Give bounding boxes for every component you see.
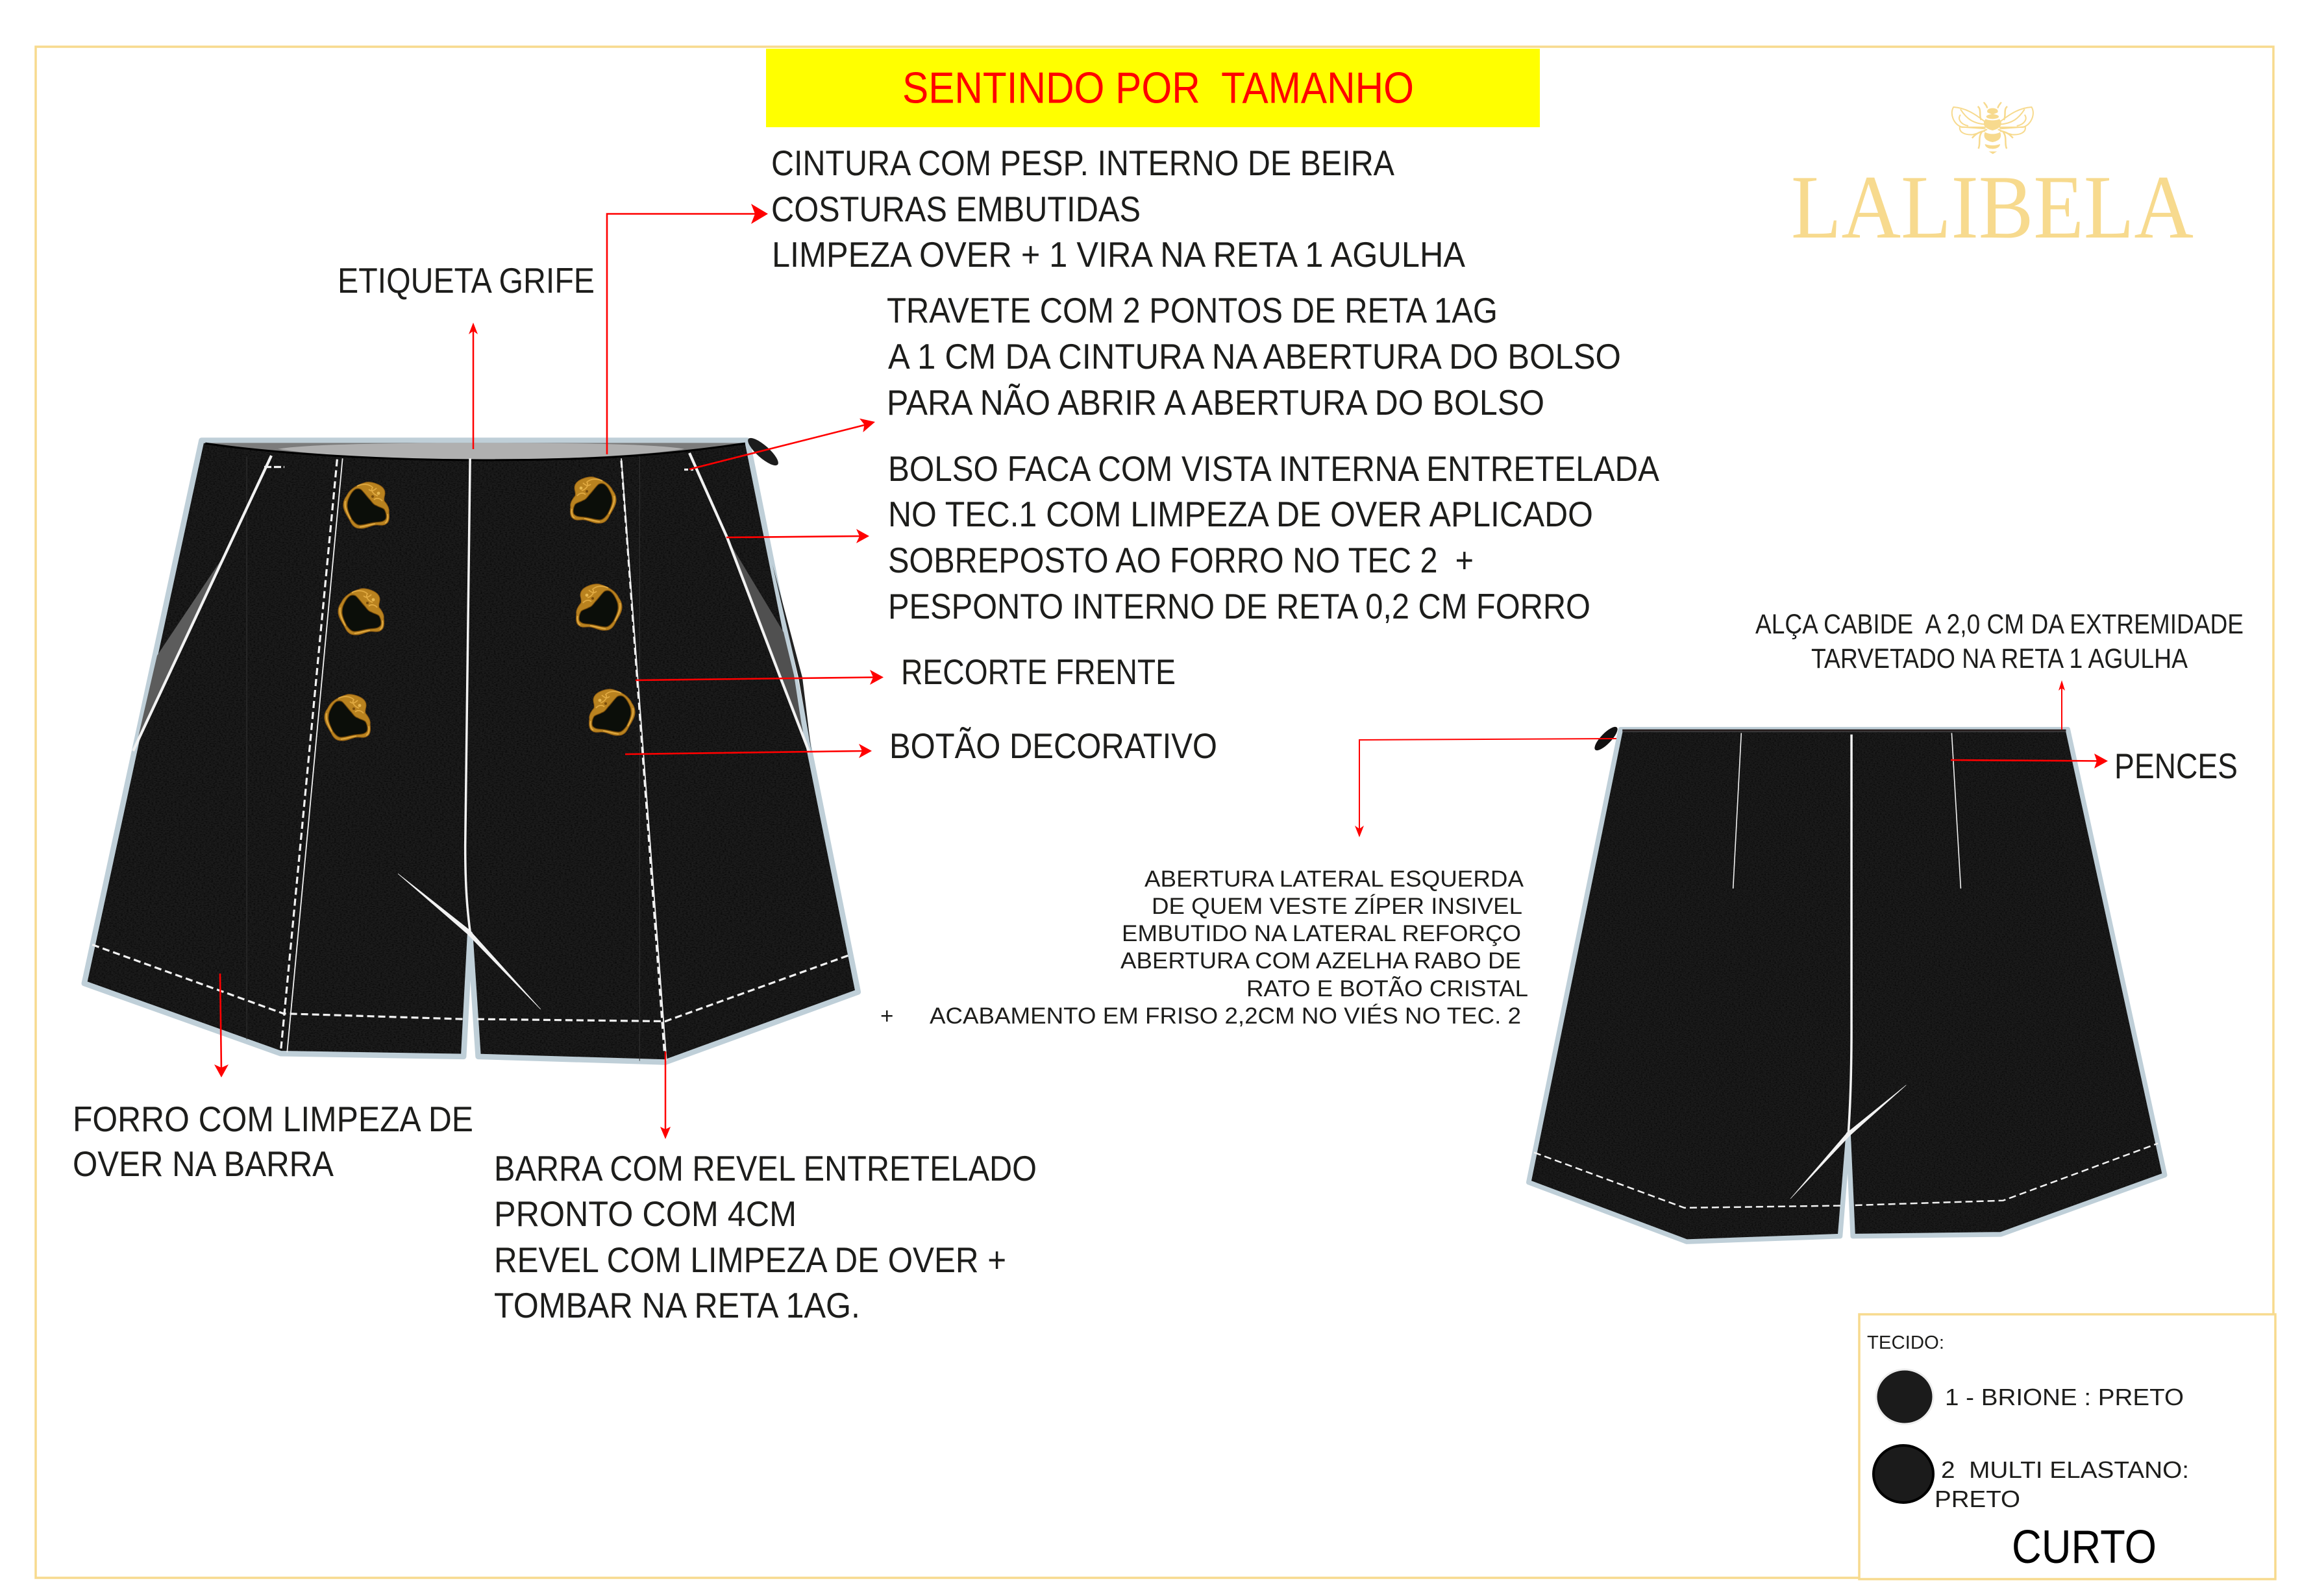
text: cintura: CINTURA COM PESP. INTERNO DE BEIRA	[771, 143, 1394, 183]
side tack back	[1592, 724, 1620, 754]
swatch: multi elastano	[1874, 1445, 1933, 1503]
arrow: pences	[1951, 754, 2108, 768]
text: abertura lateral: EMBUTIDO NA LATERAL REFORÇO	[1122, 921, 1521, 946]
text: barra	[494, 1148, 1037, 1325]
text: travete: A 1 CM DA CINTURA NA ABERTURA DO BOLSO	[888, 336, 1621, 376]
front fabric body	[84, 440, 858, 1062]
text: barra: TOMBAR NA RETA 1AG.	[494, 1285, 860, 1325]
back centre seam	[1848, 735, 1851, 1135]
label: brione: 1 - BRIONE : PRETO	[1945, 1384, 2184, 1410]
text: cintura: COSTURAS EMBUTIDAS	[771, 189, 1141, 229]
label: multi elastano: 2 MULTI ELASTANO:	[1941, 1456, 2189, 1483]
text: abertura lateral	[880, 866, 1528, 1029]
text: forro	[73, 1099, 473, 1184]
text: abertura lateral: DE QUEM VESTE ZÍPER INSIVEL	[1152, 894, 1522, 919]
text: bolso faca	[888, 448, 1659, 626]
seams and stitching	[92, 456, 848, 1061]
arrow: alca cabide	[2059, 680, 2065, 730]
text: abertura lateral: ABERTURA LATERAL ESQUERDA	[1144, 866, 1524, 892]
arrow: bolso faca	[726, 529, 869, 543]
text: cintura	[771, 143, 1465, 275]
logo: Lalibela	[1791, 102, 2194, 258]
text: bolso faca: SOBREPOSTO AO FORRO NO TEC 2 +	[888, 540, 1474, 580]
decorative buttons	[325, 477, 635, 741]
icon: bee	[1952, 102, 2033, 154]
text: abertura lateral: ACABAMENTO EM FRISO 2,2CM NO VIÉS NO TEC. 2	[930, 1003, 1521, 1029]
panel: tecido legend	[1859, 1314, 2275, 1579]
label: multi elastano	[1935, 1456, 2189, 1512]
arrow: botao decorativo	[625, 744, 872, 758]
text: barra: PRONTO COM 4CM	[494, 1194, 797, 1234]
hem stitching	[1534, 1153, 1842, 1208]
swatch: brione	[1876, 1369, 1933, 1424]
text: bolso faca: BOLSO FACA COM VISTA INTERNA ENTRETELADA	[888, 448, 1659, 489]
text: etiqueta grife: ETIQUETA GRIFE	[338, 260, 595, 301]
label: curto: CURTO	[2012, 1521, 2157, 1573]
text: alca cabide	[1755, 609, 2244, 674]
waistband lining	[205, 443, 745, 460]
text: travete	[887, 290, 1621, 423]
text: forro: OVER NA BARRA	[73, 1144, 334, 1184]
text: alca cabide: ALÇA CABIDE A 2,0 CM DA EXTREMIDADE	[1755, 609, 2244, 640]
label: multi elastano: PRETO	[1935, 1486, 2020, 1512]
text: alca cabide: TARVETADO NA RETA 1 AGULHA	[1811, 643, 2188, 674]
arrow: barra	[660, 1051, 671, 1139]
back view shorts	[1529, 724, 2165, 1242]
text: abertura lateral: +	[880, 1003, 893, 1029]
text: abertura lateral: RATO E BOTÃO CRISTAL	[1246, 976, 1528, 1001]
text: abertura lateral: ABERTURA COM AZELHA RABO DE	[1120, 948, 1521, 974]
logo wordmark: LALIBELA	[1791, 157, 2194, 258]
darts	[1733, 733, 1960, 889]
legend heading: TECIDO:	[1867, 1332, 1944, 1353]
arrow: forro	[214, 974, 229, 1077]
arrow: abertura lateral	[1355, 739, 1616, 837]
text: forro: FORRO COM LIMPEZA DE	[73, 1099, 473, 1139]
text: barra: BARRA COM REVEL ENTRETELADO	[494, 1148, 1037, 1188]
text: travete: TRAVETE COM 2 PONTOS DE RETA 1AG	[887, 290, 1498, 330]
front view shorts	[84, 434, 858, 1062]
arrow: cintura	[607, 204, 768, 454]
text: bolso faca: PESPONTO INTERNO DE RETA 0,2 CM FORRO	[888, 586, 1590, 626]
text: travete: PARA NÃO ABRIR A ABERTURA DO BOLSO	[887, 382, 1544, 423]
arrow: etiqueta grife	[469, 323, 478, 449]
text: recorte frente: RECORTE FRENTE	[901, 652, 1176, 692]
text: botao decorativo: BOTÃO DECORATIVO	[889, 726, 1217, 766]
pocket openings	[133, 453, 811, 753]
back fabric body	[1529, 730, 2165, 1242]
text: pences: PENCES	[2114, 746, 2238, 786]
side tack	[745, 434, 782, 469]
text: barra: REVEL COM LIMPEZA DE OVER +	[494, 1240, 1006, 1280]
arrow: recorte frente	[636, 670, 884, 685]
text: cintura: LIMPEZA OVER + 1 VIRA NA RETA 1 AGULHA	[772, 234, 1465, 275]
arrow: travete	[689, 419, 875, 469]
title banner: SENTINDO POR TAMANHO	[902, 64, 1414, 113]
title banner	[766, 49, 1540, 127]
text: bolso faca: NO TEC.1 COM LIMPEZA DE OVER APLICADO	[888, 494, 1593, 534]
